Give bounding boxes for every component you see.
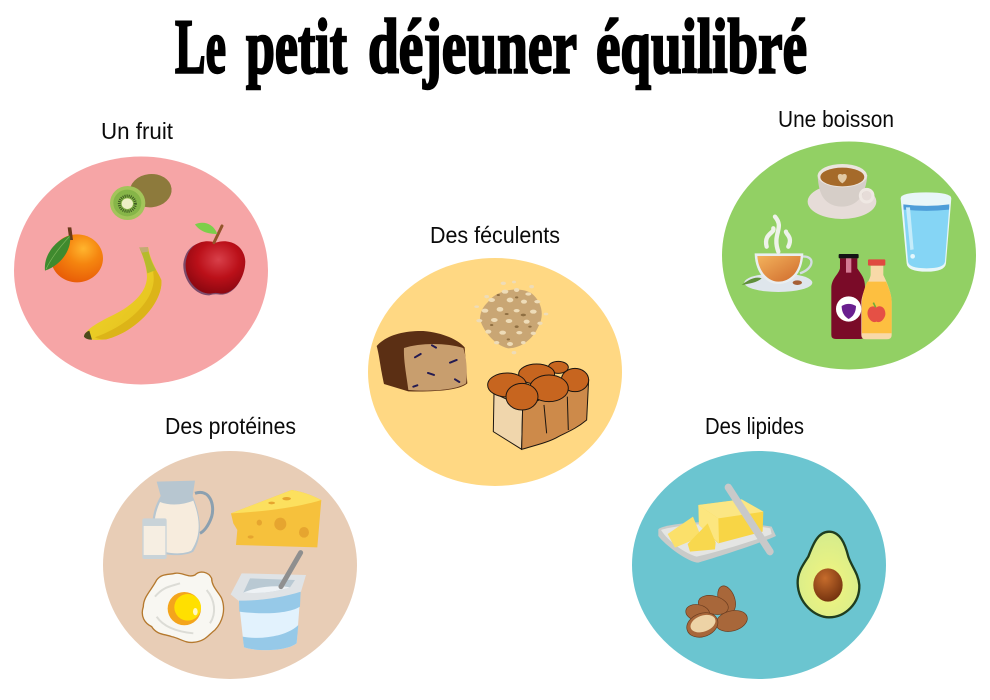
icon: butter dish	[658, 487, 776, 563]
title: équilibré	[596, 4, 807, 90]
title: déjeuner	[368, 4, 577, 90]
circle: protéines background	[103, 451, 357, 679]
icon: milk jug and glass	[142, 481, 213, 559]
panel: des féculents	[368, 222, 622, 486]
heading: des protéines: Des protéines	[165, 413, 296, 439]
heading: des lipides: Des lipides	[705, 413, 804, 439]
panel: des lipides	[632, 413, 886, 679]
icon: avocado	[798, 532, 859, 617]
heading: une boisson: Une boisson	[778, 106, 894, 132]
icon: almonds	[683, 583, 750, 641]
icon: kiwi	[110, 172, 173, 220]
icon: water glass	[901, 192, 951, 272]
heading: des féculents: Des féculents	[430, 222, 560, 248]
icon: coffee cup	[808, 164, 876, 219]
circle: lipides background	[632, 451, 886, 679]
panel: une boisson	[722, 106, 976, 370]
icon: banana	[84, 247, 161, 340]
icon: apple	[183, 223, 245, 295]
icon: yogurt	[231, 553, 306, 650]
title	[175, 4, 807, 90]
panel: des protéines	[103, 413, 357, 679]
icon: oat flakes	[474, 281, 548, 354]
circle: boisson background	[722, 142, 976, 370]
circle: féculents background	[368, 258, 622, 486]
icon: brioche	[488, 361, 589, 449]
circle: fruit background	[14, 156, 268, 384]
icon: cheese	[231, 490, 321, 547]
title: petit	[246, 4, 347, 90]
heading: un fruit: Un fruit	[101, 118, 174, 144]
panel: un fruit	[14, 118, 268, 384]
icon: juice bottles	[831, 254, 892, 339]
title: Le	[175, 4, 226, 90]
icon: orange	[45, 227, 103, 282]
icon: dark bread	[377, 331, 467, 391]
icon: fried egg	[142, 572, 224, 642]
icon: tea cup	[742, 217, 812, 292]
